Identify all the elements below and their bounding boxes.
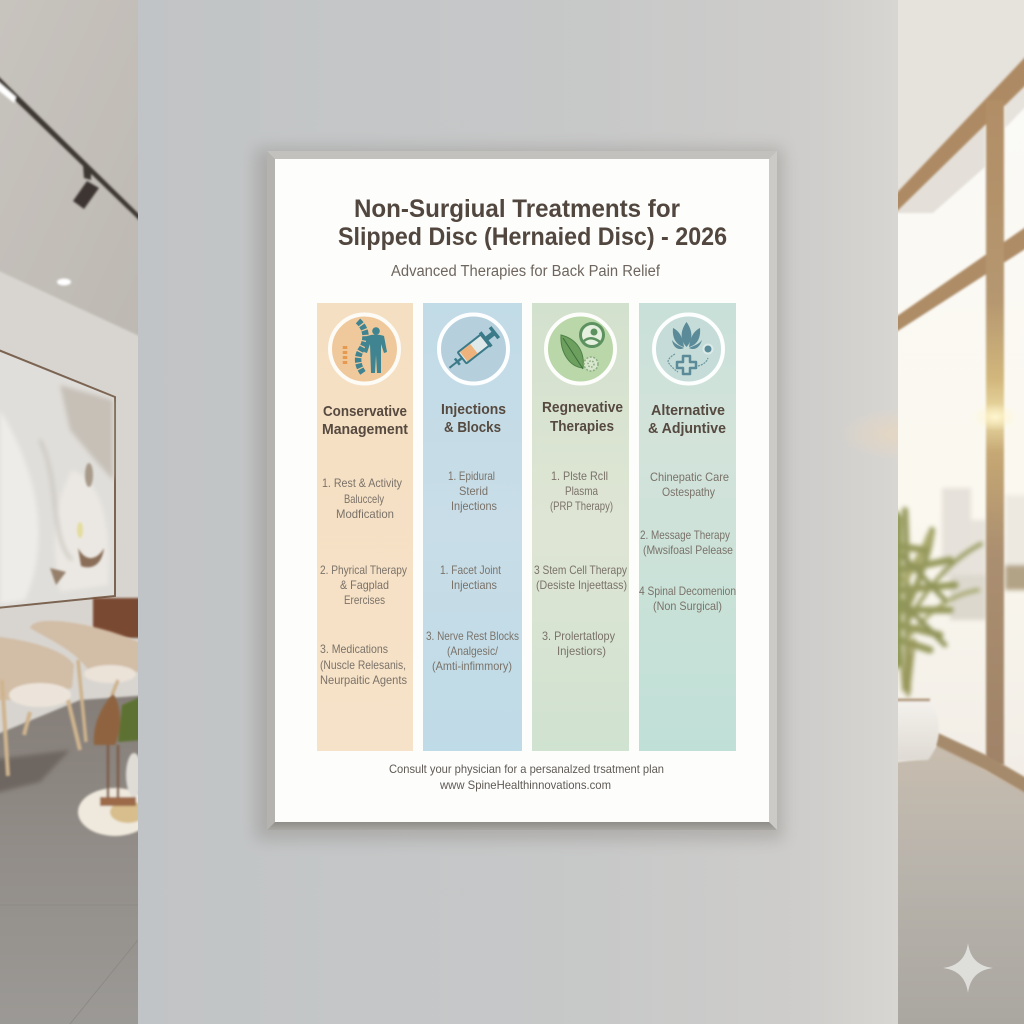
text: list: Injections: [451, 499, 497, 513]
wood cabinet: [93, 598, 148, 638]
background: right window view: [890, 0, 1024, 1024]
text: list: [639, 470, 736, 613]
text: list: (Analgesic/: [447, 644, 499, 658]
soffit under beam: [898, 126, 986, 214]
text: list: 3. Nerve Rest Blocks: [426, 629, 519, 643]
chairs: [0, 621, 145, 776]
title: [338, 195, 727, 251]
footer note: [389, 762, 664, 792]
text: list: 1. Plste Rcll: [551, 469, 608, 483]
text: list: & Fagplad: [340, 578, 389, 592]
icon: sparkle watermark: [943, 943, 993, 993]
icon: leaf and cells: [546, 314, 615, 384]
background: left lounge interior: [0, 0, 152, 1024]
text: list: 2. Message Therapy: [640, 528, 730, 542]
text: list: Erercises: [344, 593, 385, 607]
subtitle: Advanced Therapies for Back Pain Relief: [391, 263, 661, 280]
skyline: [942, 488, 1024, 620]
window frames: [890, 52, 1024, 765]
title: Slipped Disc (Hernaied Disc) - 2026: [338, 223, 727, 251]
heading: Therapies: [550, 418, 614, 435]
ceiling: [0, 0, 150, 341]
text: list: 4 Spinal Decomenion: [639, 584, 736, 598]
text: list: 1. Facet Joint: [440, 563, 502, 577]
text: list: (Mwsifoasl Pelease: [643, 543, 733, 557]
background: central wall: [250, 0, 898, 1024]
text: list: Ostespathy: [662, 485, 715, 499]
footer note: www SpineHealthinnovations.com: [439, 778, 611, 792]
title: Non-Surgiual Treatments for: [354, 195, 680, 223]
poster frame: [267, 151, 777, 830]
floor: [0, 695, 150, 1024]
text: list: 3 Stem Cell Therapy: [534, 563, 627, 577]
text: list: 2. Phyrical Therapy: [320, 563, 407, 577]
icon: lotus and cross: [654, 314, 723, 384]
painting: [0, 349, 115, 608]
heading: [648, 402, 726, 437]
side table with sculpture and plant: [76, 694, 138, 838]
text: list: Chinepatic Care: [650, 470, 729, 484]
text: list: Plasma: [565, 484, 598, 498]
heading: & Blocks: [444, 419, 501, 436]
plant pot: [890, 700, 939, 761]
sun flare: [978, 405, 1012, 429]
text: list: (Non Surgical): [653, 599, 722, 613]
text: list: [534, 469, 627, 658]
panel: regenerative therapies: [532, 303, 629, 751]
icon: syringe: [439, 314, 508, 384]
text: list: [320, 476, 407, 687]
heading: [441, 401, 506, 436]
plant: [890, 510, 981, 695]
text: list: (PRP Therapy): [550, 499, 613, 513]
icon: spine and person: [330, 314, 399, 384]
text: list: Injestiors): [557, 644, 606, 658]
text: list: (Desiste Injeettass): [536, 578, 627, 592]
text: list: 1. Rest & Activity: [322, 476, 402, 490]
heading: & Adjuntive: [648, 420, 726, 437]
upper ceiling: [898, 0, 1024, 192]
text: list: Injectians: [451, 578, 497, 592]
floor: [890, 744, 1024, 1024]
footer note: Consult your physician for a persanalzed trsatment plan: [389, 762, 664, 776]
heading: Management: [322, 421, 408, 438]
text: list: Sterid: [459, 484, 488, 498]
heading: Regnevative: [542, 399, 623, 416]
panel: conservative management: [317, 303, 413, 751]
text: list: Neurpaitic Agents: [320, 673, 407, 687]
text: list: (Amti-infimmory): [432, 659, 512, 673]
text: list: [426, 469, 519, 673]
panel: injections and blocks: [423, 303, 522, 751]
text: list: Modfication: [336, 507, 394, 521]
heading: Alternative: [651, 402, 725, 419]
heading: Injections: [441, 401, 506, 418]
heading: [322, 403, 408, 438]
heading: [542, 399, 623, 435]
track light rail: [0, 70, 145, 286]
text: list: 3. Medications: [320, 642, 388, 656]
text: list: (Nuscle Relesanis,: [320, 658, 406, 672]
text: list: 1. Epidural: [448, 469, 495, 483]
panel: alternative and adjunctive: [639, 303, 736, 751]
text: list: Baluccely: [344, 492, 384, 506]
text: list: 3. Prolertatlopy: [542, 629, 615, 643]
heading: Conservative: [323, 403, 407, 420]
